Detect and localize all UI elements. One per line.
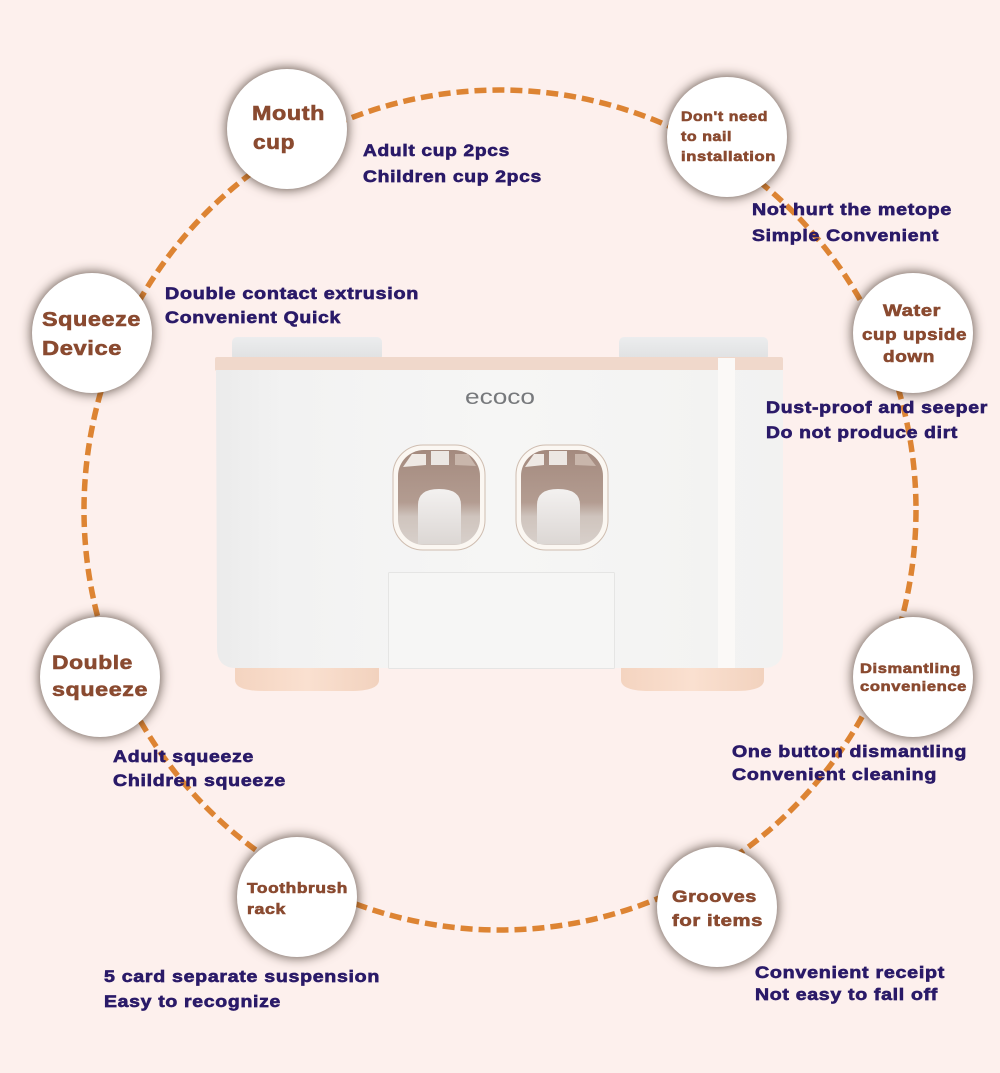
top right cup [619,337,768,361]
caption: squeeze [113,747,286,790]
caption: receipt [755,963,945,1004]
feature: Don't need to nail installation: to nail [681,129,732,144]
drawer [388,572,614,668]
feature: Don't need to nail installation: Don't need [681,109,768,124]
caption: extrusion: Convenient Quick [165,308,341,327]
caption: extrusion [165,284,419,327]
caption: cups: Adult cup 2pcs [363,141,510,160]
top left cup [232,337,382,361]
feature: Toothbrush rack [237,837,357,957]
dispenser body [216,370,783,668]
feature: Dismantling convenience: Dismantling [860,660,961,676]
feature: Water cup upside down: cup upside [862,326,967,344]
caption: dismantling [732,742,967,784]
feature: Mouth cup: Mouth [252,103,325,125]
caption: cups [363,141,542,186]
caption: metope: Simple Convenient [752,226,939,245]
feature: Toothbrush rack: rack [247,902,287,918]
caption: squeeze: Children squeeze [113,771,286,790]
feature: Squeeze Device [32,273,152,393]
feature: Toothbrush rack: Toothbrush [247,881,348,897]
feature: Double squeeze: Double [52,652,133,674]
feature: Dismantling convenience [853,617,973,737]
caption: suspension [104,967,380,1011]
feature: Double squeeze: squeeze [52,679,148,701]
caption: cups: Children cup 2pcs [363,167,542,186]
feature: Water cup upside down [853,273,973,393]
top pink band [215,357,783,371]
feature: Mouth cup: cup [253,132,295,154]
caption: dismantling: One button dismantling [732,742,967,761]
product: toothpaste dispenser [215,337,783,691]
feature: Water cup upside down: Water [883,302,941,320]
caption: metope [752,200,952,245]
caption: dismantling: Convenient cleaning [732,765,937,784]
caption: dust-proof [766,398,988,442]
feature: Dismantling convenience: convenience [860,678,967,694]
left dispenser window [393,445,485,550]
feature: Water cup upside down: down [883,348,935,366]
feature: Squeeze Device: Device [42,338,122,360]
feature: Don't need to nail installation: installation [681,149,776,164]
dashed ring connecting features [84,90,916,930]
bottom left cup [235,662,379,691]
caption: dust-proof: Do not produce dirt [766,423,958,442]
caption: receipt: Not easy to fall off [755,985,938,1004]
right dispenser window [516,445,608,550]
feature: Double squeeze [40,617,160,737]
caption: metope: Not hurt the metope [752,200,952,219]
logo: ecoco [465,386,535,409]
caption: dust-proof: Dust-proof and seeper [766,398,988,417]
feature: Grooves for items [657,847,777,967]
caption: suspension: Easy to recognize [104,992,281,1011]
feature: Don't need to nail installation [667,77,787,197]
feature: Squeeze Device: Squeeze [42,309,141,331]
caption: suspension: 5 card separate suspension [104,967,380,986]
vertical highlight [718,358,735,668]
caption: extrusion: Double contact extrusion [165,284,419,303]
feature: Grooves for items: for items [672,911,763,930]
caption: squeeze: Adult squeeze [113,747,254,766]
bottom right cup [621,662,764,691]
caption: receipt: Convenient receipt [755,963,945,982]
feature: Grooves for items: Grooves [672,887,757,906]
feature: Mouth cup [227,69,347,189]
